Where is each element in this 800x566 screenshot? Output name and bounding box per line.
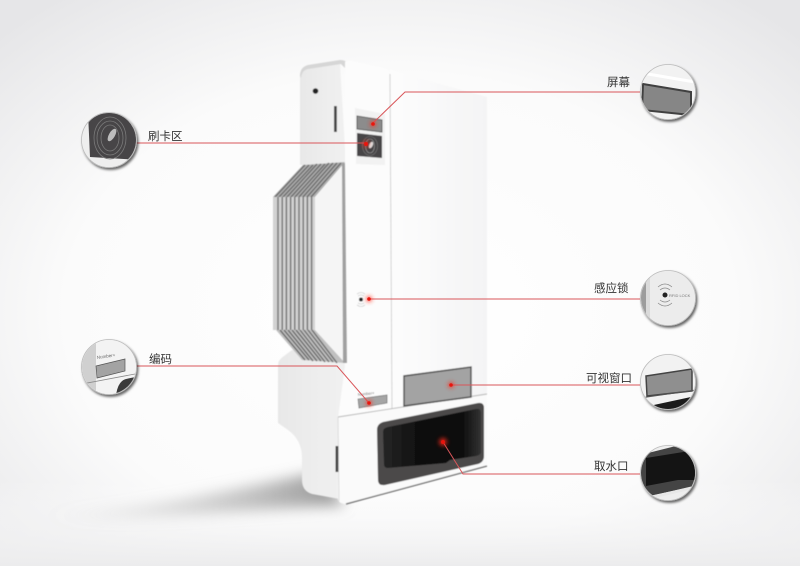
rear lower housing (278, 350, 345, 500)
camera hole (313, 88, 318, 94)
label: sensor lock: 感应锁 (594, 281, 629, 295)
callout lines (136, 92, 640, 474)
callout: sensor lock: RFID LOCK (669, 293, 691, 298)
rfid lock (357, 292, 365, 306)
callout: visible window (640, 354, 700, 412)
front strip (338, 61, 393, 418)
label: screen: 屏幕 (607, 75, 630, 89)
number plate: Number+ (358, 390, 375, 397)
screen plate (355, 108, 385, 165)
label: visible window: 可视窗口 (586, 371, 632, 385)
heat sink front cover (315, 163, 345, 363)
side slot lower (336, 446, 338, 472)
callout: sensor lock (640, 270, 696, 326)
card reader (357, 133, 382, 158)
callout: card area (82, 112, 140, 168)
callout: water outlet (640, 445, 700, 500)
water outlet (377, 403, 484, 485)
red markers (363, 121, 454, 446)
heat sink fins (273, 162, 345, 363)
callout: code (80, 340, 140, 395)
screen (357, 116, 382, 132)
callout: code: Number+ (96, 352, 116, 360)
base (338, 395, 487, 504)
label: code: 编码 (149, 352, 172, 366)
floor shadow (40, 472, 345, 517)
top rim (300, 60, 350, 78)
side slot upper (334, 106, 337, 132)
number plate (358, 390, 387, 408)
callout: screen (640, 64, 696, 120)
label: card area: 刷卡区 (148, 130, 182, 143)
front right panel (390, 70, 487, 409)
product: water dispenser (273, 60, 487, 504)
label: water outlet: 取水口 (594, 460, 628, 473)
rear upper housing (300, 63, 346, 165)
visible window (404, 367, 471, 406)
